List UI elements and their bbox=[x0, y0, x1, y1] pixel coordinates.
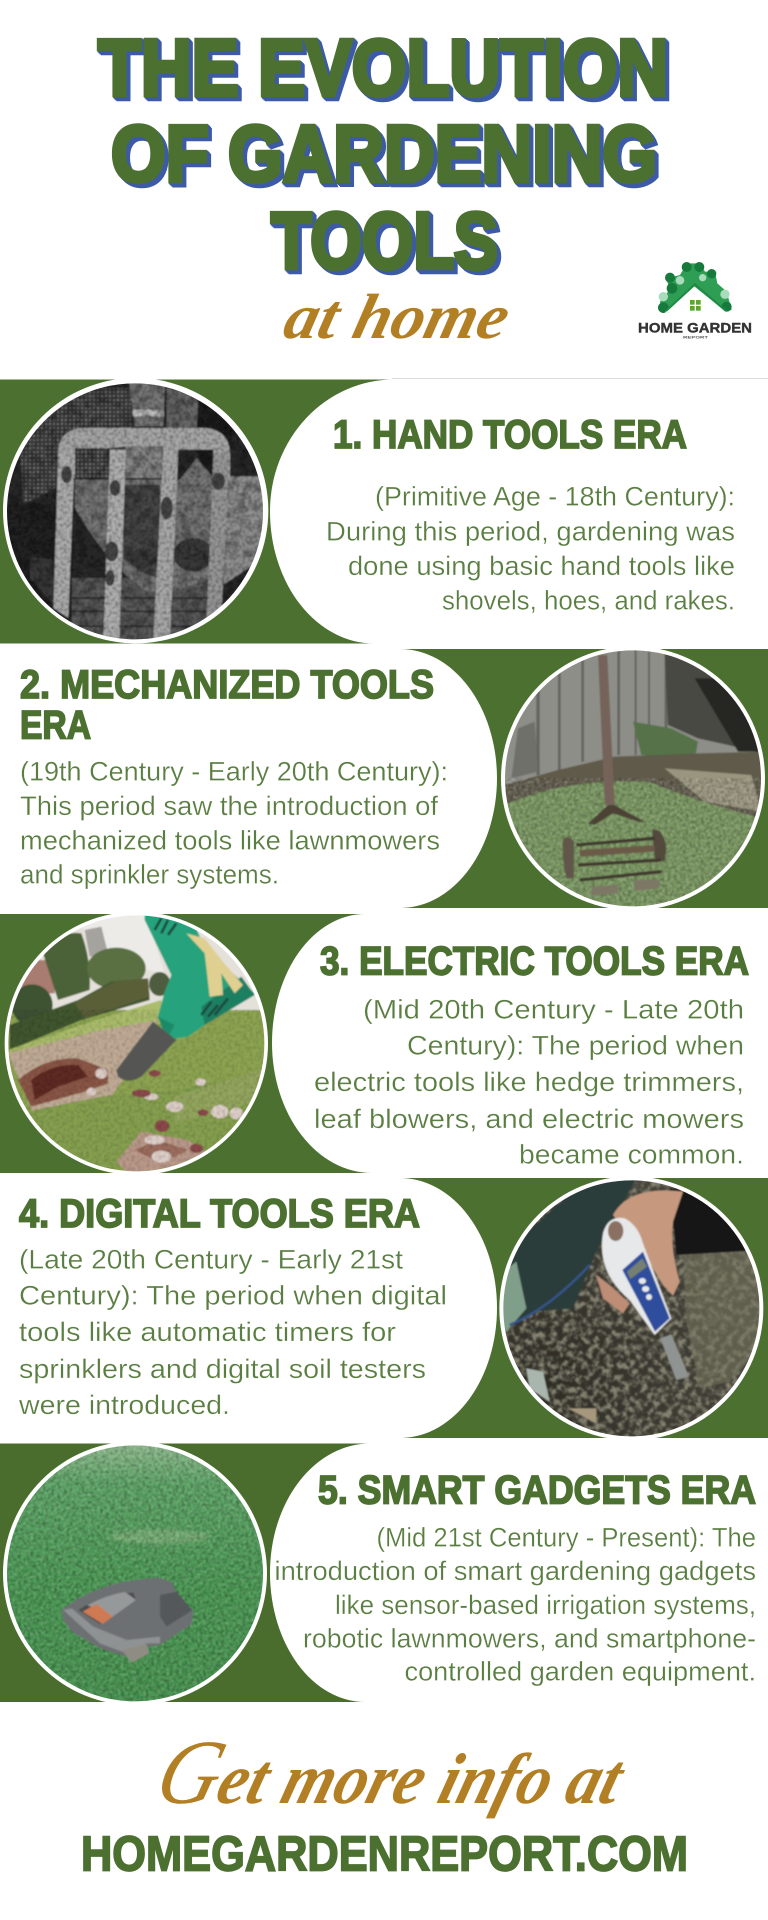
body text: mechanized tools like lawnmowers bbox=[20, 826, 440, 856]
logo wordmark: REPORT bbox=[683, 336, 709, 340]
logo wordmark: HOME GARDEN bbox=[638, 320, 752, 336]
photo: leaf blower bbox=[1, 910, 271, 1180]
heading: ERA bbox=[20, 704, 91, 748]
body text: leaf blowers, and electric mowers bbox=[314, 1104, 744, 1134]
title bbox=[98, 23, 668, 285]
photo: soil tester bbox=[496, 1175, 766, 1445]
panel: mechanized tools era bbox=[0, 645, 768, 915]
heading: 2. MECHANIZED TOOLS bbox=[20, 663, 434, 707]
logo bbox=[658, 262, 732, 313]
photo: rusty fork bbox=[0, 378, 270, 648]
body text: Century): The period when bbox=[407, 1031, 744, 1061]
body text bbox=[326, 482, 735, 615]
heading: 1. HAND TOOLS ERA bbox=[333, 413, 687, 457]
title: OF GARDENING bbox=[111, 109, 657, 198]
body text: like sensor-based irrigation systems, bbox=[335, 1590, 756, 1620]
title: TOOLS bbox=[271, 196, 498, 285]
heading: 4. DIGITAL TOOLS ERA bbox=[19, 1192, 420, 1236]
body text: Century): The period when digital bbox=[19, 1281, 447, 1311]
body text: electric tools like hedge trimmers, bbox=[314, 1067, 744, 1097]
body text: sprinklers and digital soil testers bbox=[19, 1354, 426, 1384]
body text: During this period, gardening was bbox=[326, 517, 735, 547]
body text: were introduced. bbox=[18, 1390, 230, 1420]
heading bbox=[20, 663, 434, 748]
body text bbox=[314, 995, 744, 1170]
call to action script: Get more info at bbox=[146, 1722, 640, 1824]
body text: (Mid 21st Century - Present): The bbox=[376, 1523, 756, 1553]
body text: (Mid 20th Century - Late 20th bbox=[363, 995, 744, 1025]
panel: electric tools era bbox=[0, 910, 768, 1180]
panel: smart gadgets era bbox=[0, 1440, 768, 1710]
subtitle: at home: at home bbox=[277, 282, 517, 353]
panel: digital tools era bbox=[0, 1175, 768, 1445]
body text: (19th Century - Early 20th Century): bbox=[20, 757, 448, 787]
body text: became common. bbox=[519, 1140, 744, 1170]
body text: robotic lawnmowers, and smartphone- bbox=[303, 1623, 756, 1653]
body text bbox=[20, 757, 448, 890]
panel: hand tools era bbox=[0, 378, 768, 648]
body text: tools like automatic timers for bbox=[19, 1317, 396, 1347]
body text: (Primitive Age - 18th Century): bbox=[375, 482, 735, 512]
title: THE EVOLUTION bbox=[98, 23, 668, 112]
body text: (Late 20th Century - Early 21st bbox=[19, 1245, 404, 1275]
body text: This period saw the introduction of bbox=[20, 791, 438, 821]
photo: reel mower bbox=[498, 645, 768, 915]
body text: introduction of smart gardening gadgets bbox=[274, 1556, 756, 1586]
body text: controlled garden equipment. bbox=[404, 1657, 756, 1687]
body text bbox=[274, 1523, 756, 1687]
photo: robotic mower bbox=[0, 1440, 270, 1710]
body text: shovels, hoes, and rakes. bbox=[442, 585, 735, 615]
website url: HOMEGARDENREPORT.COM bbox=[81, 1828, 688, 1882]
body text bbox=[18, 1245, 447, 1420]
body text: done using basic hand tools like bbox=[348, 551, 735, 581]
body text: and sprinkler systems. bbox=[20, 860, 279, 890]
